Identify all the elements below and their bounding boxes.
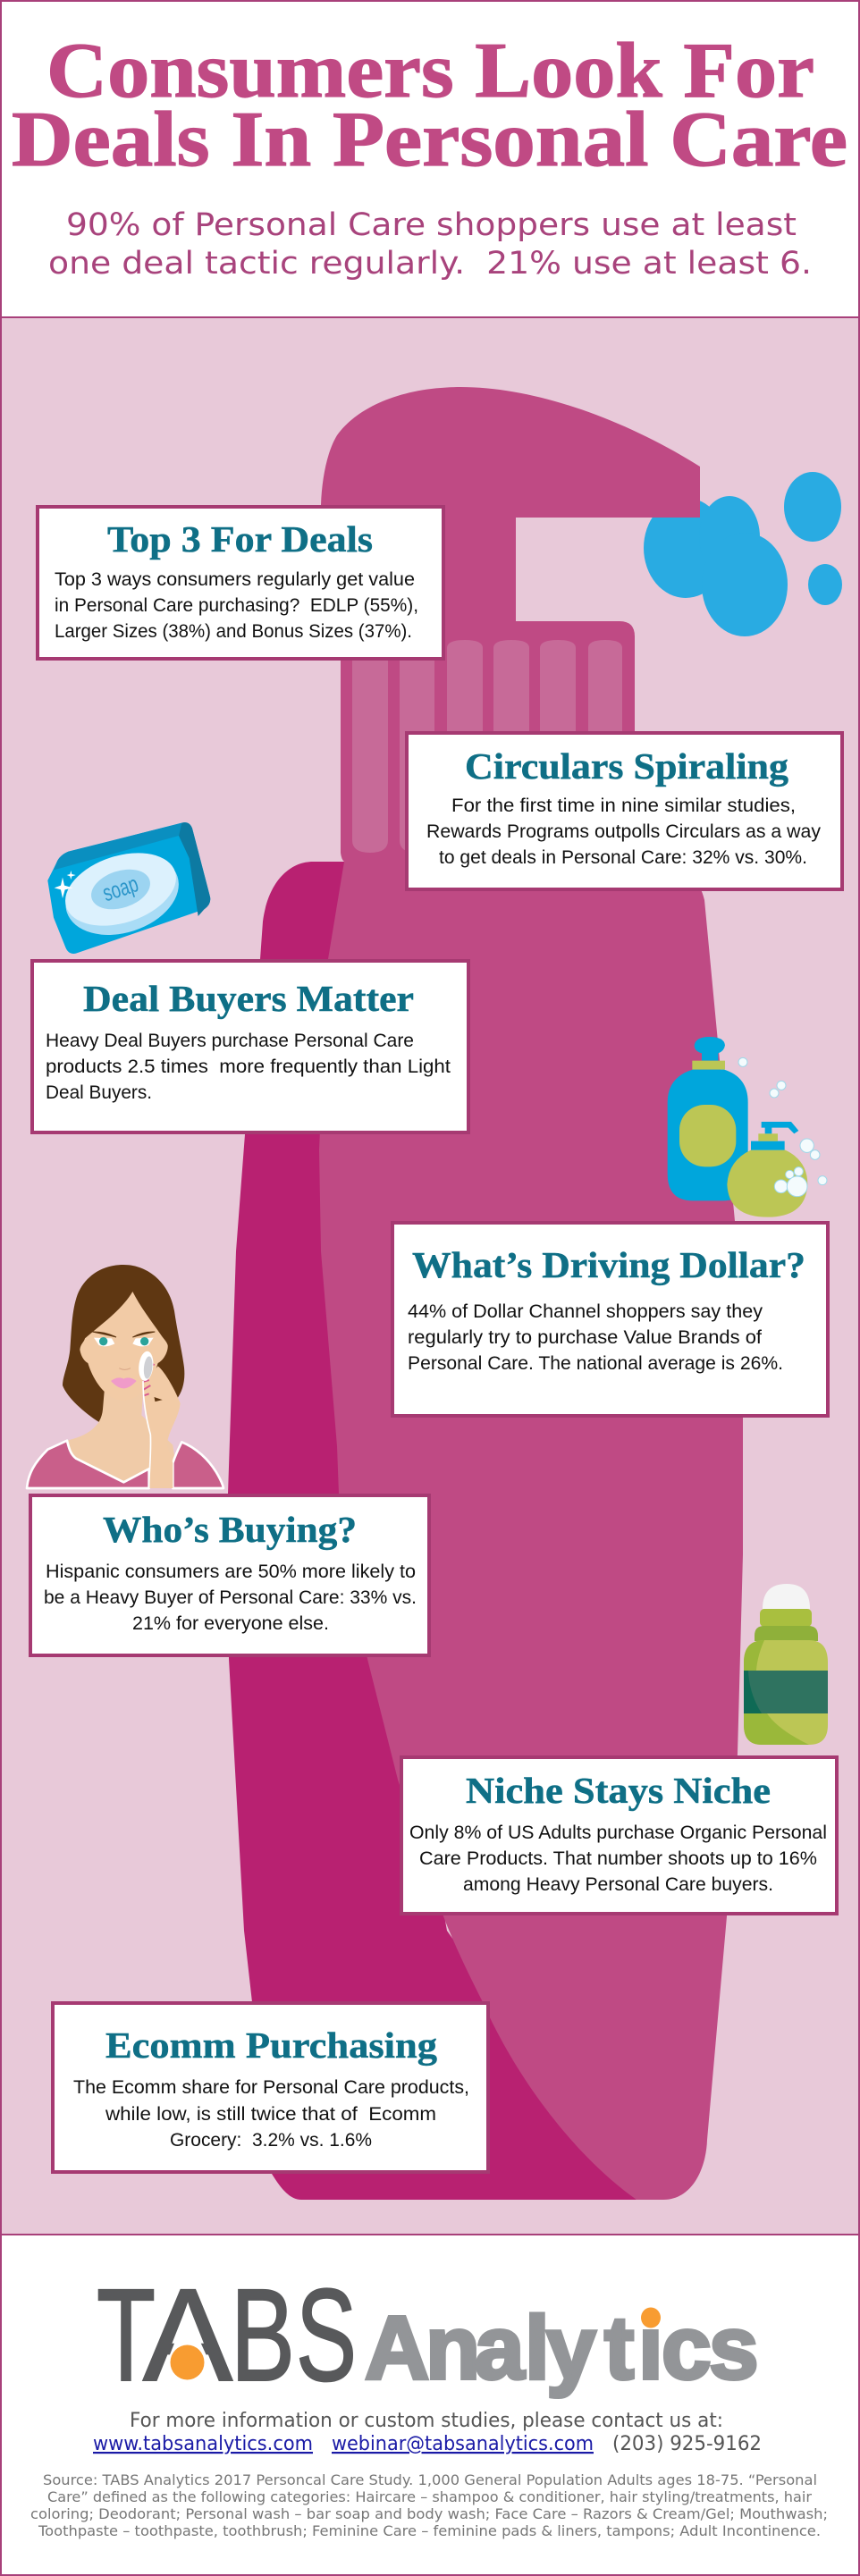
body text bbox=[55, 569, 418, 642]
logo: TABS Analytics: Analytics bbox=[365, 2298, 759, 2398]
body text: to get deals in Personal Care: 32% vs. 30%. bbox=[439, 847, 807, 868]
panel: ecomm purchasing bbox=[53, 2003, 488, 2172]
illustration: woman cleansing face bbox=[27, 1265, 223, 1488]
logo: TABS Analytics: S bbox=[296, 2262, 357, 2409]
subtitle bbox=[48, 207, 812, 282]
hand and arm bbox=[143, 1366, 181, 1488]
bottle main body bbox=[319, 621, 743, 2200]
body text bbox=[73, 2077, 469, 2151]
contact links: webinar@tabsanalytics.com bbox=[332, 2433, 594, 2455]
body text: in Personal Care purchasing? EDLP (55%), bbox=[55, 595, 418, 616]
logo: TABS Analytics: T bbox=[97, 2262, 156, 2409]
body text: among Heavy Personal Care buyers. bbox=[463, 1874, 773, 1895]
heading: Top 3 For Deals bbox=[107, 518, 373, 560]
bottle dark side bbox=[228, 862, 637, 2200]
pump bottle illustration bbox=[228, 387, 743, 2200]
panel: top 3 for deals bbox=[38, 507, 443, 659]
body text: products 2.5 times more frequently than Light bbox=[46, 1056, 451, 1077]
subtitle: one deal tactic regularly. 21% use at least 6. bbox=[48, 246, 812, 282]
contact links: (203) 925-9162 bbox=[612, 2433, 762, 2455]
body text: Deal Buyers. bbox=[46, 1082, 152, 1103]
contact links bbox=[93, 2433, 762, 2455]
body text: 21% for everyone else. bbox=[132, 1613, 329, 1634]
body text bbox=[426, 796, 821, 868]
body text: Care Products. That number shoots up to 16% bbox=[419, 1848, 817, 1869]
body text bbox=[408, 1301, 783, 1374]
source note: Source: TABS Analytics 2017 Personcal Care Study. 1,000 General Population Adults ages 18-75. “Personal bbox=[43, 2471, 817, 2488]
title bbox=[12, 28, 847, 183]
panel: deal buyers matter bbox=[32, 961, 468, 1132]
body text: Heavy Deal Buyers purchase Personal Care bbox=[46, 1031, 414, 1051]
icon: shampoo bottles bbox=[668, 1037, 827, 1217]
body text: For the first time in nine similar studies, bbox=[451, 796, 796, 816]
heading: Who’s Buying? bbox=[103, 1509, 357, 1550]
neck and chest bbox=[67, 1392, 179, 1488]
footer panel bbox=[1, 2235, 859, 2575]
logo: TABS Analytics: B bbox=[231, 2262, 295, 2409]
body text: regularly try to purchase Value Brands of bbox=[408, 1327, 762, 1348]
body text bbox=[44, 1562, 417, 1634]
header panel bbox=[1, 1, 859, 317]
body text: be a Heavy Buyer of Personal Care: 33% vs. bbox=[44, 1587, 417, 1608]
logo: TABS Analytics bbox=[97, 2262, 759, 2409]
shirt bbox=[27, 1441, 149, 1488]
icon: soap bar: soap bbox=[99, 870, 141, 906]
body text: while low, is still twice that of Ecomm bbox=[105, 2104, 436, 2125]
icon: roll-on deodorant bbox=[744, 1584, 828, 1745]
body text: Hispanic consumers are 50% more likely to bbox=[46, 1562, 416, 1582]
source note bbox=[30, 2471, 828, 2539]
body text: Grocery: 3.2% vs. 1.6% bbox=[170, 2130, 372, 2151]
subtitle: 90% of Personal Care shoppers use at least bbox=[66, 207, 797, 243]
eyes bbox=[94, 1338, 114, 1346]
panel: circulars spiraling bbox=[407, 733, 842, 889]
body text bbox=[46, 1031, 451, 1103]
icon: soap bar bbox=[47, 822, 210, 954]
heading: Deal Buyers Matter bbox=[83, 978, 414, 1019]
title: Consumers Look For bbox=[46, 28, 814, 114]
body text: Only 8% of US Adults purchase Organic Personal bbox=[409, 1823, 827, 1843]
body text: Top 3 ways consumers regularly get value bbox=[55, 569, 415, 590]
body text: Larger Sizes (38%) and Bonus Sizes (37%). bbox=[55, 621, 412, 642]
title: Deals In Personal Care bbox=[12, 97, 847, 183]
pink background panel bbox=[1, 317, 859, 2235]
body text: Rewards Programs outpolls Circulars as a way bbox=[426, 821, 821, 842]
heading: Ecomm Purchasing bbox=[105, 2025, 438, 2066]
heading: What’s Driving Dollar? bbox=[412, 1244, 805, 1285]
collar ribs bbox=[352, 640, 622, 858]
panel: what's driving dollar bbox=[392, 1223, 828, 1416]
panel: niche stays niche bbox=[401, 1757, 837, 1914]
source note: coloring; Deodorant; Personal wash – bar soap and body wash; Face Care – Razors & Cream/Gel; Mouthwash; bbox=[30, 2505, 828, 2522]
heading: Niche Stays Niche bbox=[466, 1770, 771, 1811]
pump head bbox=[321, 387, 700, 626]
panel: who's buying bbox=[30, 1495, 429, 1655]
source note: Toothpaste – toothpaste, toothbrush; Feminine Care – feminine pads & liners, tampons; Adult Incontinence. bbox=[38, 2522, 821, 2539]
hair bbox=[63, 1265, 184, 1423]
face bbox=[80, 1292, 168, 1401]
soap foam bubbles bbox=[644, 472, 842, 636]
heading: Circulars Spiraling bbox=[465, 745, 789, 787]
contact line: For more information or custom studies, please contact us at: bbox=[130, 2410, 723, 2432]
contact links: www.tabsanalytics.com bbox=[93, 2433, 313, 2455]
body text bbox=[409, 1823, 827, 1895]
body text: The Ecomm share for Personal Care products, bbox=[73, 2077, 469, 2098]
body text: Personal Care. The national average is 26%. bbox=[408, 1353, 783, 1374]
body text: 44% of Dollar Channel shoppers say they bbox=[408, 1301, 763, 1322]
cotton pad bbox=[138, 1351, 155, 1382]
logo: TABS Analytics: A bbox=[143, 2262, 232, 2409]
source note: Care” defined as the following categories: Haircare – shampoo & conditioner, hair styling/treatments, hair bbox=[47, 2488, 812, 2505]
